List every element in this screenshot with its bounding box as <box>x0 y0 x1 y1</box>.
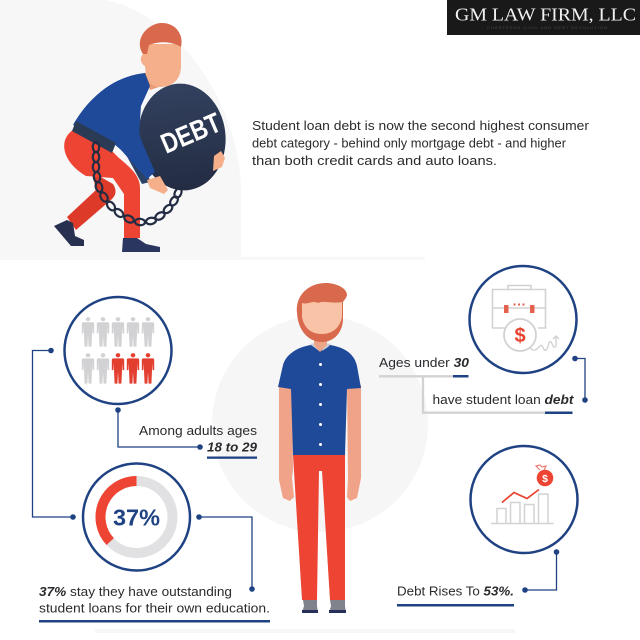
icon: squiggle string <box>530 336 559 350</box>
circle outline <box>470 266 576 373</box>
logo tagline: CHARTERED CIVIL AND DEBT RESOLUTION <box>487 25 607 30</box>
caption: outstanding loans: student loans for their own education. <box>39 600 270 616</box>
right hand <box>213 151 225 171</box>
panel: 37 percent donut <box>83 464 190 570</box>
intro text block <box>252 119 589 168</box>
logo name: GM LAW FIRM, LLC <box>455 4 636 24</box>
connector: briefcase to caption <box>572 356 588 403</box>
neck <box>314 334 327 352</box>
connector: chart to caption <box>522 549 559 593</box>
belt <box>72 121 116 153</box>
icon: briefcase <box>492 286 546 328</box>
panel: bottom faint band <box>95 629 515 633</box>
shirt buttons <box>319 363 322 446</box>
inner shirt shadow <box>118 132 150 184</box>
icon: money bag dollar: $ <box>542 473 548 485</box>
caption: ages under 30 <box>379 355 574 414</box>
caption: ages under 30: Ages under 30 <box>379 355 469 370</box>
circle outline <box>470 446 578 553</box>
panel: people statistic <box>64 297 172 404</box>
central standing man illustration <box>278 283 361 613</box>
caption: outstanding loans <box>39 584 270 622</box>
chain <box>93 142 183 226</box>
neck <box>144 70 162 90</box>
front shoe <box>122 238 160 252</box>
icon: briefcase clasps <box>504 304 534 313</box>
icon: money bag tie <box>536 465 546 470</box>
icon: dollar sign: $ <box>514 325 526 347</box>
panel: briefcase icon <box>470 266 576 373</box>
donut value arc <box>100 481 136 542</box>
donut value: 37% <box>113 504 160 530</box>
icon: grey people <box>82 317 154 384</box>
icon: red people <box>112 353 154 384</box>
right sole <box>329 610 346 613</box>
caption: adults ages: 18 to 29 <box>207 440 258 454</box>
left collar <box>310 343 319 351</box>
connector: people to donut <box>32 348 76 520</box>
intro text block: than both credit cards and auto loans. <box>252 154 497 168</box>
logo banner <box>447 0 640 35</box>
caption: outstanding loans: 37% stay they have outstanding <box>39 584 232 599</box>
left arm <box>279 385 294 501</box>
connector: people to age caption <box>115 407 203 450</box>
back shoe <box>54 220 84 246</box>
caption: ages under 30: have student loan debt <box>432 392 574 407</box>
debt ball <box>133 79 231 195</box>
intro text block: Student loan debt is now the second highest consumer <box>252 119 589 133</box>
icon: coin <box>504 319 536 351</box>
head <box>141 44 181 87</box>
front leg <box>64 130 140 238</box>
icon: money bag <box>537 470 553 486</box>
face <box>302 302 342 334</box>
panel: section divider band <box>0 257 425 260</box>
man dragging debt ball illustration <box>54 23 231 252</box>
trousers <box>293 455 345 600</box>
beard and hair <box>297 283 347 342</box>
right arm <box>347 385 361 501</box>
panel: rising chart icon <box>470 446 578 553</box>
intro text block: debt category - behind only mortgage debt - and higher <box>252 136 566 150</box>
caption: debt rises: Debt Rises To 53%. <box>397 584 514 598</box>
ball label: DEBT <box>156 107 225 160</box>
caption: adults ages <box>139 423 258 459</box>
left sole <box>302 610 318 613</box>
left hand <box>147 176 168 194</box>
shirt <box>278 345 361 455</box>
circle outline <box>83 464 190 570</box>
right collar <box>322 343 331 351</box>
icon: trend line <box>502 490 539 502</box>
left shoe <box>302 600 318 613</box>
right shoe <box>329 600 346 613</box>
blue sweater <box>73 73 155 179</box>
back leg <box>67 172 116 230</box>
connector: donut to caption <box>196 514 255 592</box>
caption: debt rises <box>397 584 514 606</box>
donut track <box>100 481 172 553</box>
central background circle <box>212 316 428 532</box>
hair <box>140 23 182 54</box>
icon: bars <box>491 494 554 524</box>
panel: top background <box>0 0 241 257</box>
caption: adults ages: Among adults ages <box>139 423 257 438</box>
circle outline <box>64 297 172 404</box>
